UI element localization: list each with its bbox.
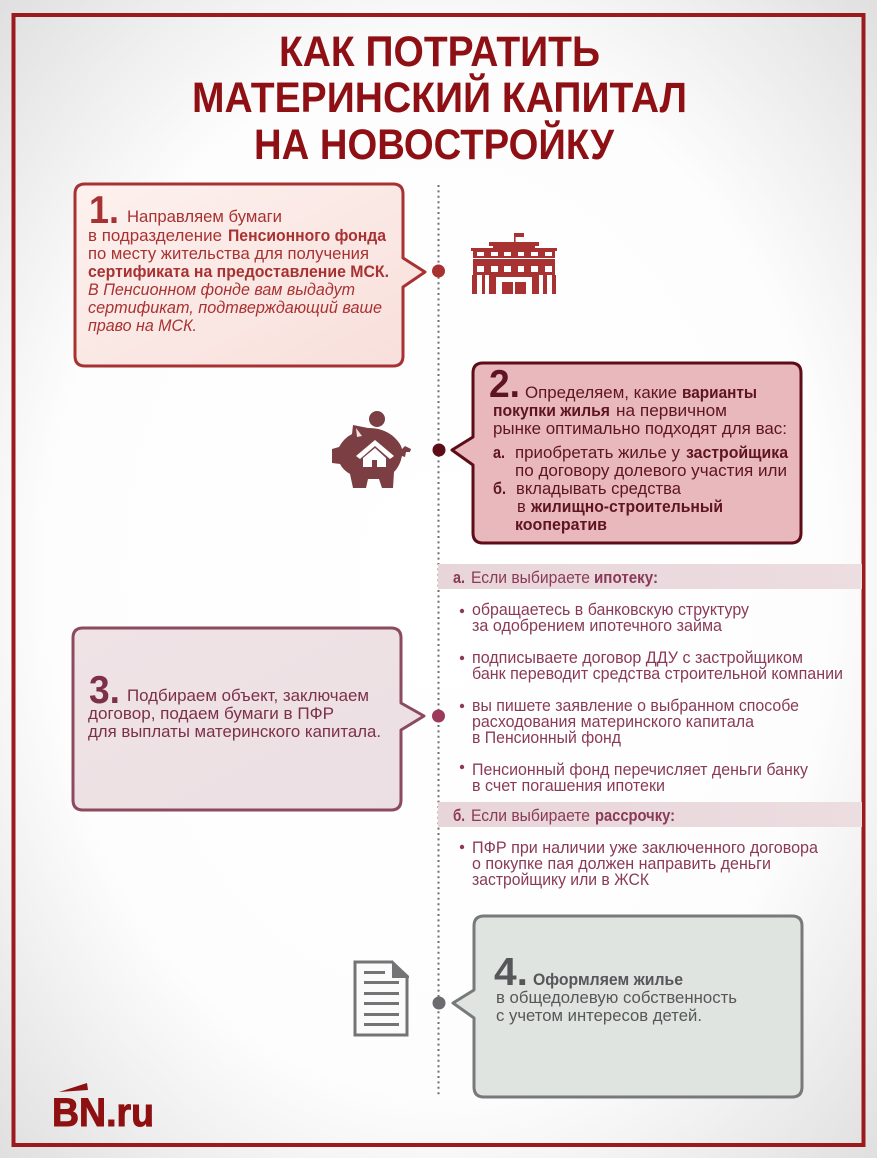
logo: BN.ru: BN.ru: [52, 1091, 154, 1135]
timeline dot 4: [432, 996, 446, 1010]
list: installment steps: ПФР при наличии уже заключенного договора: [472, 839, 819, 857]
panel: step 3: Подбираем объект, заключаем: [127, 687, 369, 705]
panel: step 3: договор, подаем бумаги в ПФР: [88, 705, 334, 723]
panel: step 1: В Пенсионном фонде вам выдадут: [88, 281, 355, 299]
panel: step 1: [75, 184, 425, 366]
list: mortgage steps: банк переводит средства строительной компании: [472, 665, 843, 683]
list: installment steps: о покупке пая должен направить деньги: [472, 855, 771, 873]
panel: step 4: Оформляем жилье: [533, 971, 683, 989]
dotted timeline: [438, 185, 440, 1095]
list: mortgage steps: в счет погашения ипотеки: [472, 777, 665, 795]
panel: step 2: на первичном: [616, 402, 727, 420]
panel: step 3: для выплаты материнского капитала.: [88, 723, 381, 741]
list: mortgage steps: в Пенсионный фонд: [472, 729, 621, 747]
panel: step 2: 2.: [489, 363, 520, 406]
panel: step 2: варианты: [682, 384, 757, 402]
list: mortgage steps: обращаетесь в банковскую структуру: [472, 601, 750, 619]
panel: step 1: сертификата на предоставление МСК.: [88, 263, 389, 281]
panel: step 2: б.: [493, 480, 506, 498]
section band: b: б.: [453, 807, 465, 825]
timeline dot 2: [432, 444, 446, 456]
panel: step 2: приобретать жилье у: [515, 444, 681, 462]
section band: b: Если выбираете: [471, 807, 590, 825]
panel: step 2: по договору долевого участия или: [515, 462, 787, 480]
section band: b: рассрочку:: [595, 807, 675, 825]
section band: a: а.: [453, 569, 465, 587]
list: installment steps: застройщику или в ЖСК: [472, 871, 649, 889]
timeline dot 1: [432, 264, 445, 278]
section band: a: ипотеку:: [594, 569, 658, 587]
panel: step 1: Направляем бумаги: [127, 208, 282, 226]
icon: document: [355, 960, 409, 1035]
section band: a: [438, 564, 862, 589]
panel: step 4: с учетом интересов детей.: [496, 1007, 702, 1025]
panel: step 2: покупки жилья: [493, 402, 610, 420]
panel: step 2: рынке оптимально подходят для вас:: [493, 420, 787, 438]
section band: a: Если выбираете: [471, 569, 590, 587]
list: mortgage steps: Пенсионный фонд перечисляет деньги банку: [472, 761, 809, 779]
title: [192, 28, 687, 169]
list: installment steps: [460, 839, 819, 889]
panel: step 2: [452, 363, 801, 543]
panel: step 2: кооператив: [515, 516, 607, 534]
list: mortgage steps: расходования материнского капитала: [472, 713, 755, 731]
panel: step 2: жилищно-строительный: [530, 498, 723, 516]
panel: step 1: в подразделение: [88, 227, 222, 245]
icon: government building: [471, 233, 557, 294]
panel: step 2: вкладывать средства: [516, 480, 682, 498]
panel: step 2: а.: [493, 444, 505, 462]
list: mortgage steps: подписываете договор ДДУ с застройщиком: [472, 649, 803, 667]
list: mortgage steps: [460, 601, 843, 795]
panel: step 1: по месту жительства для получения: [88, 245, 369, 263]
list: mortgage steps: за одобрением ипотечного займа: [472, 617, 723, 635]
timeline dot 3: [432, 710, 445, 722]
panel: step 2: Определяем, какие: [525, 384, 677, 402]
panel: step 1: 1.: [89, 189, 119, 232]
panel: step 1: право на МСК.: [88, 317, 197, 335]
panel: step 4: 4.: [494, 951, 528, 994]
panel: step 3: [73, 628, 424, 810]
icon: piggy bank with house: [332, 411, 411, 488]
panel: step 4: в общедолевую собственность: [496, 989, 737, 1007]
title: НА НОВОСТРОЙКУ: [254, 120, 615, 169]
panel: step 2: застройщика: [686, 444, 789, 462]
panel: step 2: в: [517, 498, 526, 516]
list: mortgage steps: вы пишете заявление о выбранном способе: [472, 697, 799, 715]
panel: step 1: Пенсионного фонда: [228, 227, 387, 245]
panel: step 4: [453, 916, 802, 1097]
panel: step 1: сертификат, подтверждающий ваше: [88, 299, 382, 317]
section band: b: [438, 802, 862, 827]
title: МАТЕРИНСКИЙ КАПИТАЛ: [192, 73, 687, 122]
title: КАК ПОТРАТИТЬ: [279, 28, 600, 76]
panel: step 3: 3.: [89, 669, 120, 712]
